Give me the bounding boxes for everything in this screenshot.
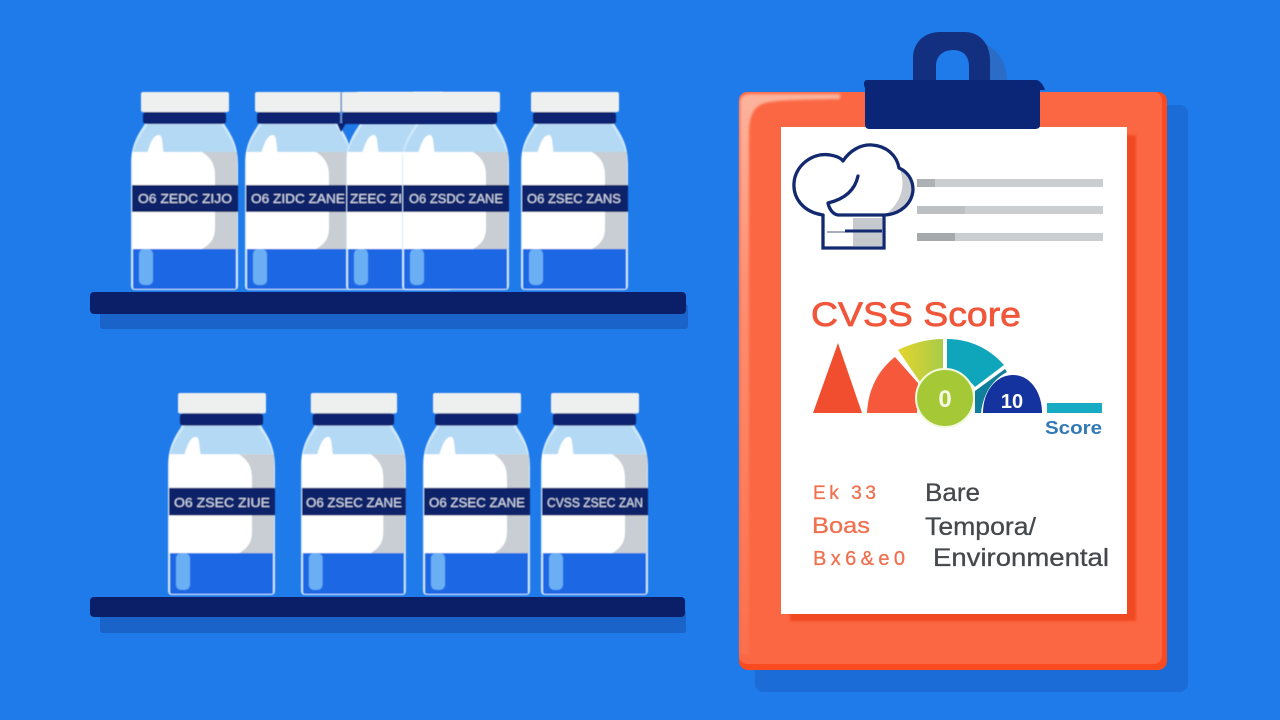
score labels: left column: Boas [812, 513, 870, 538]
gauge chart [813, 339, 1102, 438]
clipboard board edge [739, 92, 1167, 670]
gauge red sector [867, 357, 918, 413]
paper shadow [790, 135, 1136, 621]
score labels: left column [812, 483, 905, 570]
score labels: right column: Bare [925, 479, 980, 507]
jar 7 [301, 393, 406, 595]
header text lines [917, 179, 1103, 241]
score labels: left column: Ek 33 [813, 483, 876, 504]
jar 3 [346, 92, 453, 290]
jar 1: O6 ZEDC ZIJO [138, 191, 232, 206]
jar 6 [168, 393, 275, 595]
jar 4 [402, 92, 509, 290]
gauge green dial with 0 [916, 369, 974, 427]
heading: CVSS Score: CVSS Score [811, 296, 1021, 334]
jar 2 [245, 92, 352, 290]
jar 8: O6 ZSEC ZANE [429, 495, 525, 510]
score labels: right column [925, 479, 1109, 572]
clip loop [913, 32, 990, 84]
board highlight [740, 94, 840, 655]
jar 9: CVSS ZSEC ZAN [547, 495, 643, 510]
jar 7: O6 ZSEC ZANE [306, 495, 402, 510]
paper sheet [781, 127, 1127, 614]
shelf: bottom [90, 597, 686, 633]
gauge navy dome with 10 [983, 375, 1042, 413]
legend label: Score [1045, 418, 1102, 438]
gauge navy dome with 10: 10 [1001, 391, 1023, 413]
jar 5: O6 ZSEC ZANS [527, 191, 621, 206]
jar 8 [423, 393, 530, 595]
shelf: top [90, 292, 688, 329]
score labels: left column: Bx6&e0 [813, 548, 905, 570]
top shelf of jars [90, 92, 688, 329]
jar 2: O6 ZIDC ZANE [251, 191, 345, 206]
clip loop shadow [975, 40, 1007, 80]
jar 3: ZEEC ZI [350, 191, 402, 206]
bottom shelf of jars [90, 393, 686, 633]
jar 6: O6 ZSEC ZIUE [174, 495, 270, 510]
jar 5 [521, 92, 628, 290]
gauge teal sector [947, 339, 1004, 387]
shared cap of jars 3 and 4 [337, 92, 498, 132]
gauge small teal segment [975, 369, 1007, 413]
jar 4: O6 ZSDC ZANE [409, 191, 503, 206]
score labels: right column: Environmental [933, 544, 1109, 572]
legend bar [1047, 403, 1102, 413]
jar 1 [131, 92, 238, 290]
clip base [864, 80, 1045, 129]
clipboard board [739, 92, 1162, 664]
jar 9 [541, 393, 648, 595]
score labels: right column: Tempora/ [925, 513, 1036, 541]
gauge triangle [813, 343, 862, 413]
clip [864, 32, 1045, 129]
gauge green dial with 0: 0 [938, 386, 952, 413]
gauge yellow sector [898, 339, 943, 382]
clipboard shadow [755, 105, 1188, 692]
clipboard [739, 32, 1188, 692]
icon: chef hat [794, 145, 913, 248]
